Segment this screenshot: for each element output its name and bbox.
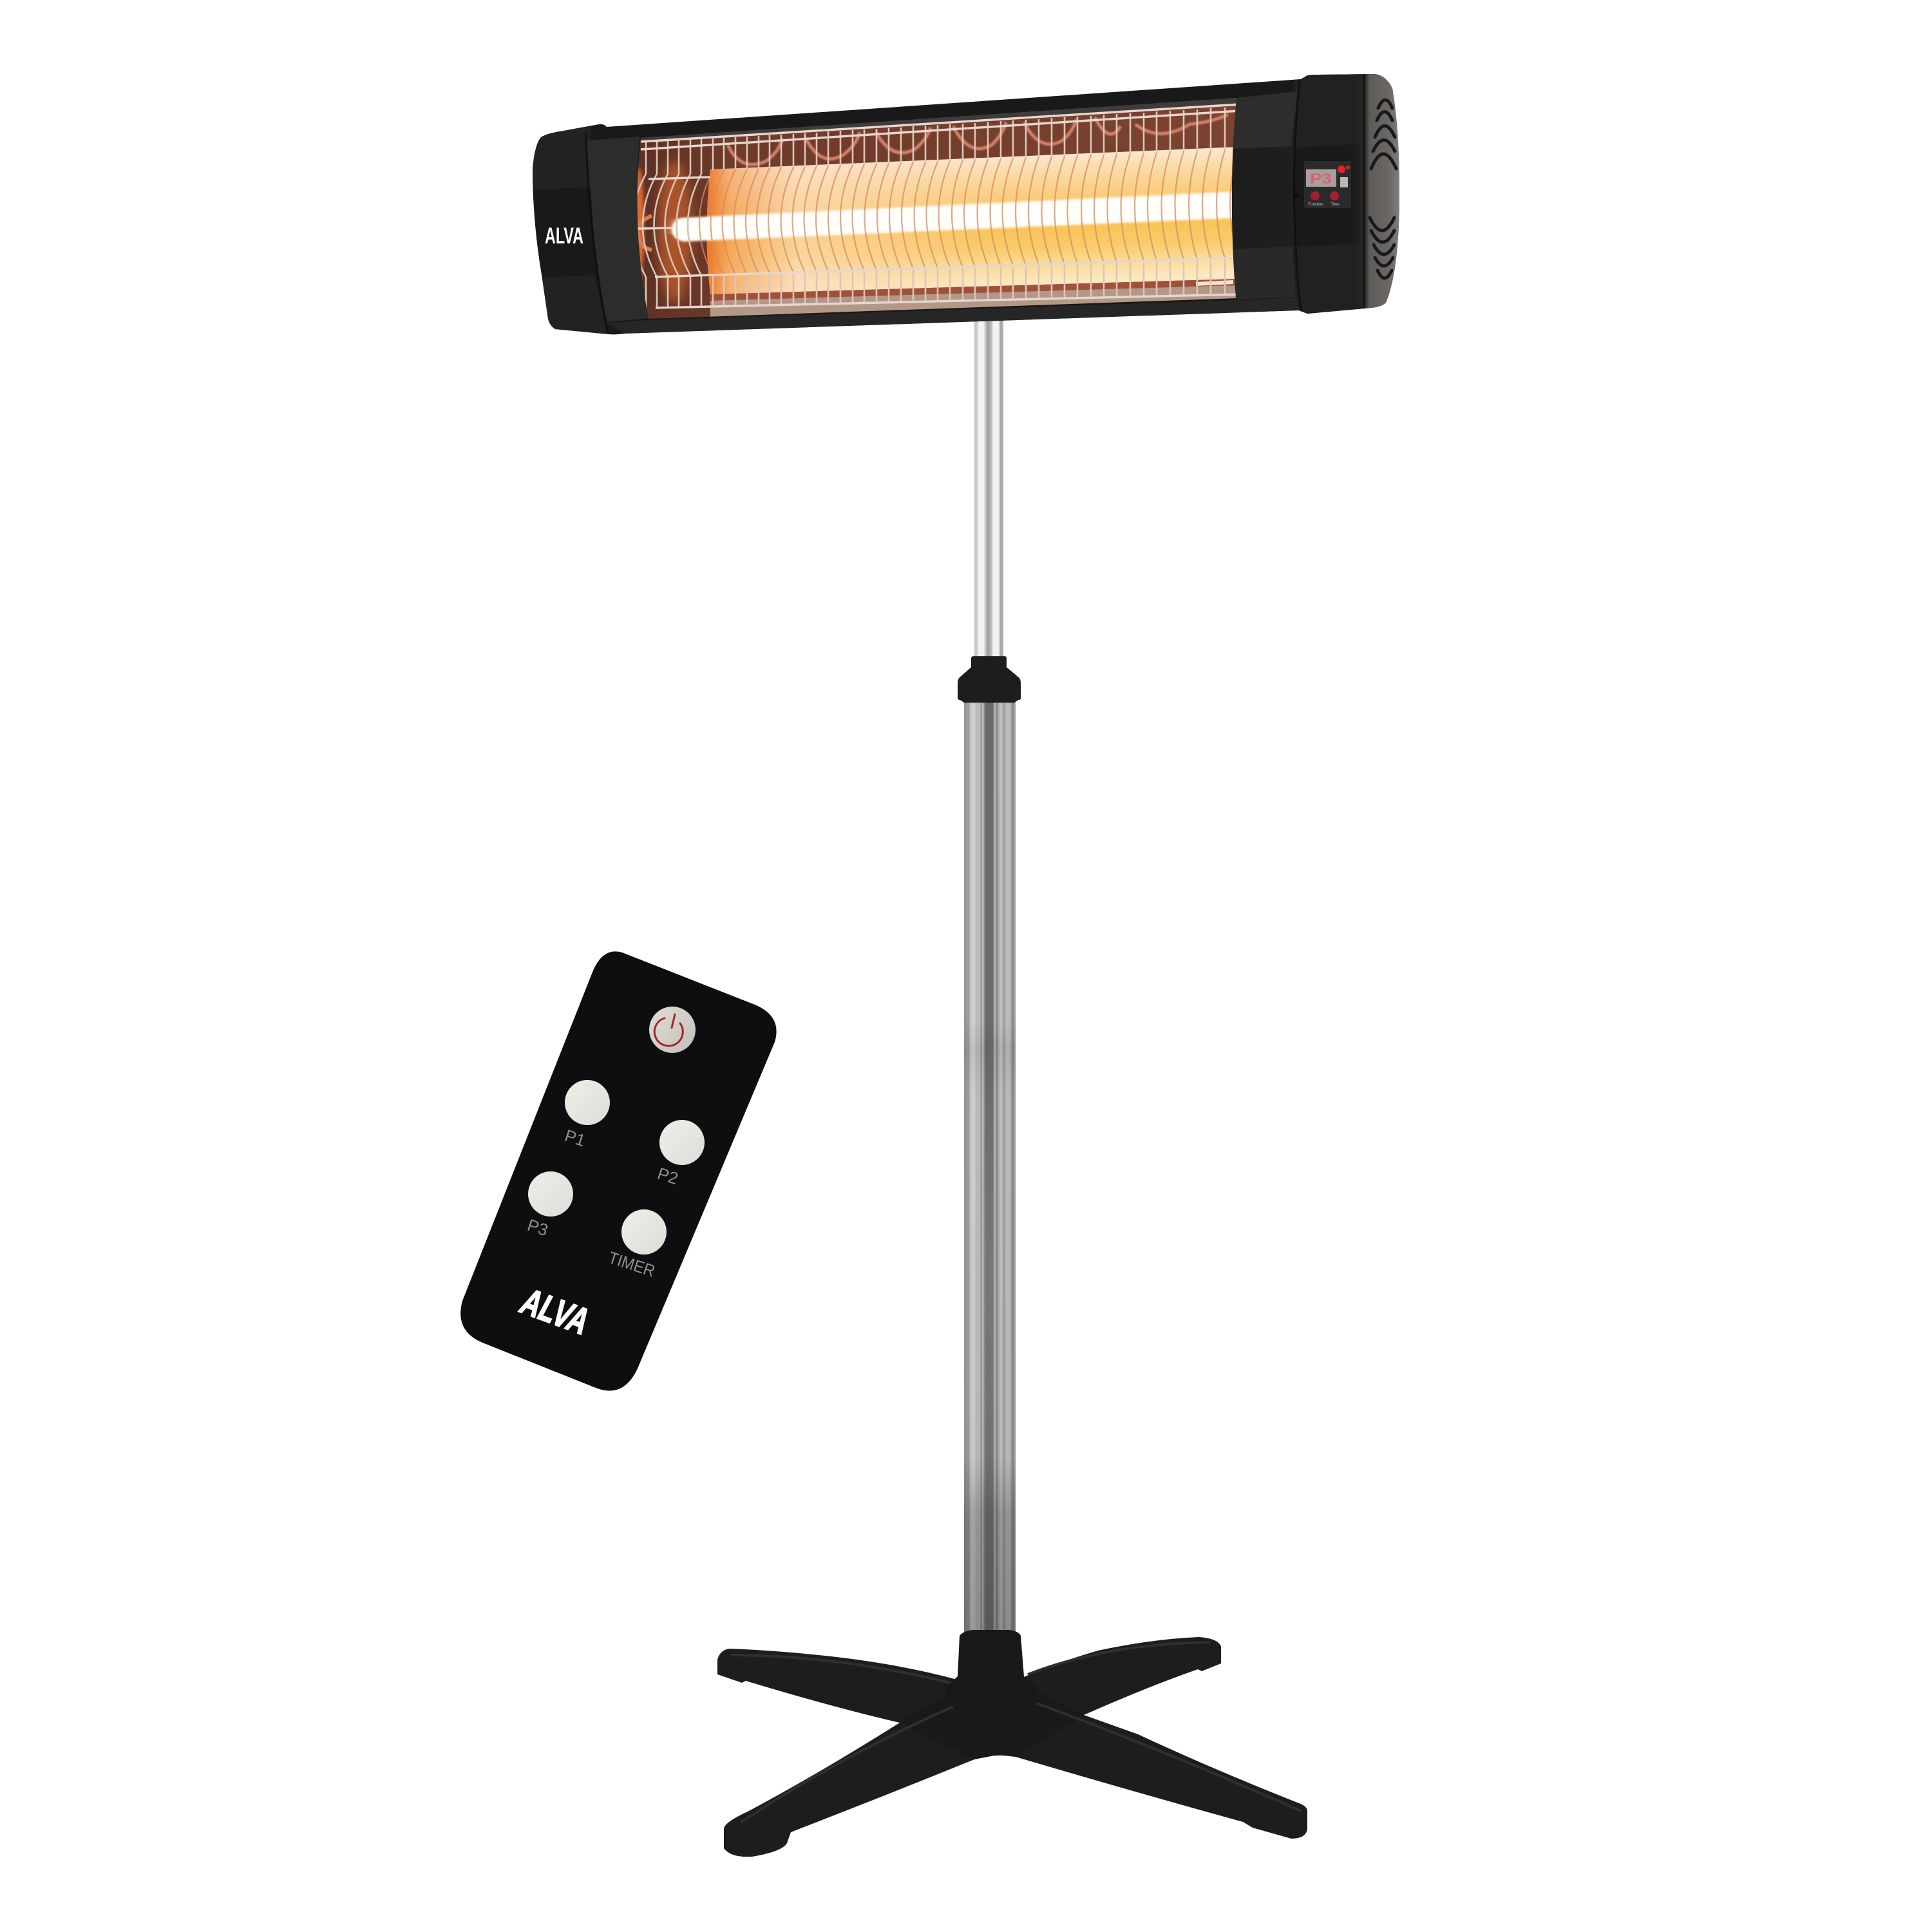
vent slots upper (1371, 100, 1396, 169)
grille wires: straight sections (646, 107, 1238, 308)
remote control (460, 951, 777, 1391)
housing tone bands and end caps (528, 64, 1404, 341)
button labels: Time (1331, 203, 1340, 207)
lower housing strip (607, 298, 1299, 334)
button labels (1308, 203, 1340, 207)
grille wires: left curved sections (632, 174, 701, 277)
base arm: front left (724, 1698, 992, 1857)
lower reflector band (710, 279, 1236, 317)
right cap rim (1352, 74, 1399, 310)
base center block (900, 1687, 1084, 1759)
right side panel upper band (1232, 91, 1298, 149)
LED digits: P3 (1310, 171, 1332, 187)
cross base (717, 1630, 1307, 1857)
reflected coil squiggles (728, 115, 1228, 164)
button TIMER (621, 1209, 667, 1255)
grille wires: curved sections over glow (699, 149, 1238, 275)
orange left reflections (634, 161, 692, 303)
remote labels: TIMER (606, 1247, 658, 1281)
grey glass top strip (634, 95, 1240, 141)
lower pole section (964, 699, 1016, 1645)
remote labels (525, 1126, 681, 1281)
grille rails (638, 104, 1240, 308)
indicator LEDs (1338, 166, 1350, 173)
base arm: back left (717, 1649, 966, 1723)
power button (649, 1007, 696, 1053)
base arm moulding lines (731, 1642, 1301, 1823)
remote brand logo: ALVA (515, 1280, 594, 1343)
height adjustment collar (958, 656, 1021, 703)
panel screw (1293, 193, 1298, 197)
remote labels: P3 (525, 1215, 551, 1240)
heater housing (533, 74, 1399, 334)
panel buttons (1311, 191, 1339, 200)
vent slots lower (1370, 218, 1394, 278)
control panel backing (1304, 161, 1351, 208)
right cap bands (1291, 71, 1362, 316)
heater unit (528, 64, 1404, 341)
button P2 (659, 1120, 705, 1165)
button P1 (565, 1080, 610, 1125)
base arm: back right (1018, 1637, 1221, 1715)
upper pole section (974, 320, 1003, 661)
heater brand logo: ALVA (545, 223, 583, 249)
left side panel (587, 137, 649, 322)
remote labels: P1 (562, 1126, 588, 1150)
remote body (460, 951, 777, 1391)
control panel (1304, 161, 1351, 208)
stand: telescopic pole and cross base (717, 320, 1307, 1857)
right side panel lower band (1232, 247, 1296, 299)
receiver window (1340, 177, 1348, 187)
glass window with element (631, 90, 1243, 328)
button labels: Function (1308, 203, 1323, 207)
right side panel (1231, 91, 1299, 307)
copper reflector (631, 90, 1243, 328)
glowing reflector panel (707, 147, 1240, 294)
base arm: front right (966, 1698, 1307, 1839)
cap seams (586, 71, 1364, 332)
button P3 (528, 1171, 573, 1217)
LED display (1306, 169, 1336, 187)
left end cap bands (533, 126, 607, 334)
base socket (945, 1630, 1038, 1707)
tube glow at left end (666, 218, 696, 234)
remote labels: P2 (655, 1164, 681, 1188)
heating tube (672, 191, 1243, 242)
